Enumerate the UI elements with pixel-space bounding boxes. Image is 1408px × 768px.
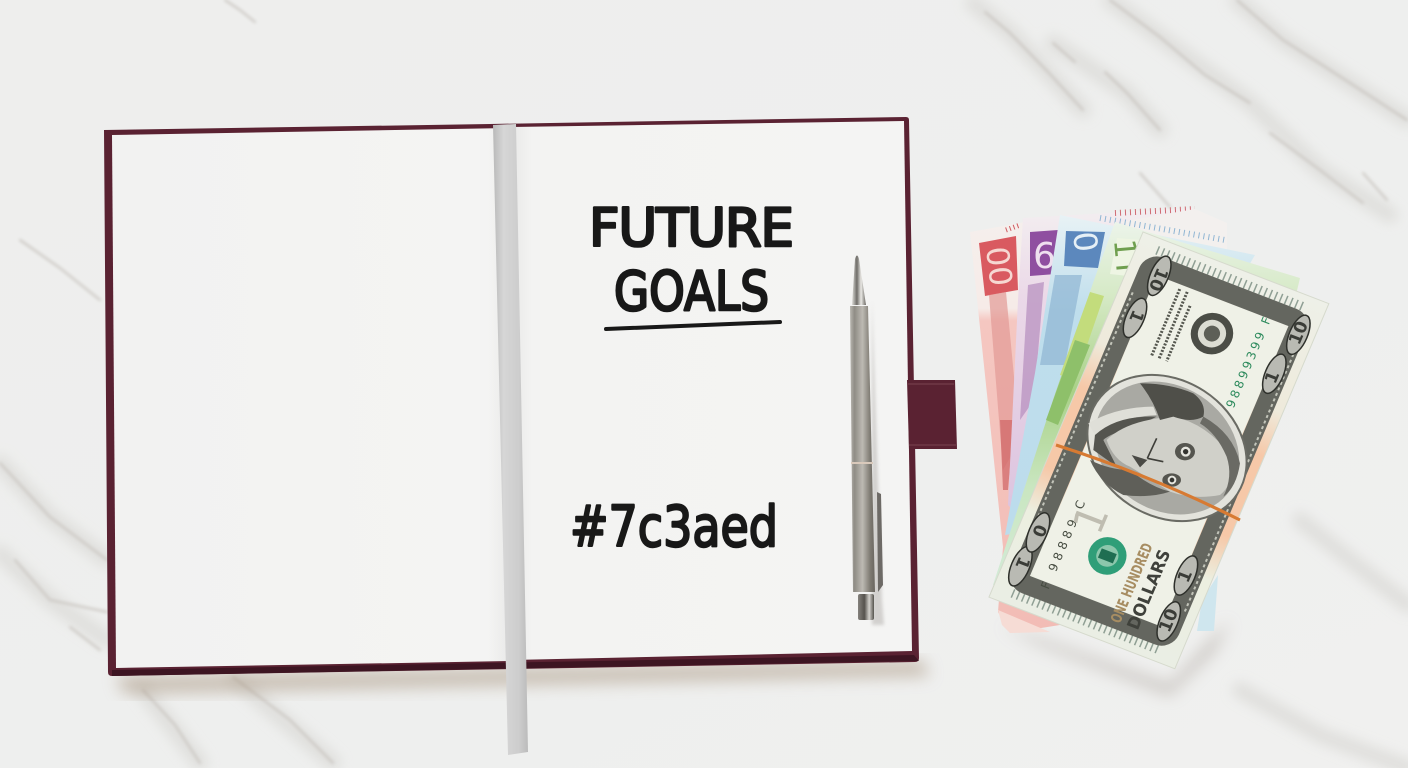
pink banknote [970,222,1060,633]
numerals on ovals: 1 [1010,554,1034,572]
numerals on ovals: 0 [1027,521,1050,540]
bill engraved frame [1017,263,1301,639]
green banknote: 1T [1106,238,1144,279]
pen end cap [858,594,874,620]
right page [512,121,912,660]
upper eye [1175,443,1195,460]
hundred dollar bill: DOLLARS [1124,547,1175,633]
stack of banknotes [970,208,1329,695]
pen barrel [850,306,875,592]
heading line one: FUTURE [589,198,794,259]
purple banknote: 6 [1033,236,1056,277]
heading line two: GOALS [614,260,769,323]
bill paper [989,232,1329,669]
blue banknote: 0 [1065,229,1105,254]
pale edges under stack [998,610,1050,633]
numerals on ovals [1008,259,1313,638]
nose and mouth [1132,455,1147,467]
frame highlights [1024,292,1293,612]
pen clip [877,492,883,592]
pen [850,256,884,625]
hair [1140,383,1204,420]
portrait [1060,345,1274,551]
numerals on ovals: 10 [1285,318,1313,348]
blue banknote [1005,215,1255,535]
portrait oval [1060,345,1274,551]
large treasury numeral: 1 [1063,498,1119,540]
pink banknote: 00 [978,245,1019,288]
blue banknote lower edge [1197,575,1218,631]
lower eye [1162,473,1181,487]
serial number bottom: F 98889 C [1038,498,1088,591]
face [1107,417,1232,497]
hundred dollar bill [989,232,1329,669]
cover bottom edge [112,655,919,676]
bill edge ticks [1012,250,1305,650]
pen tip [852,256,866,305]
signature lines top [1152,289,1195,361]
green seal [1082,532,1132,580]
ribbon bookmark [493,124,528,755]
numerals on ovals: 10 [1144,265,1172,294]
coat [1090,460,1170,496]
serial number top: A 98899399 F [1216,315,1274,426]
pen shadow [872,300,884,625]
handwritten hex code: #7c3aed [570,495,778,560]
denomination lettering: ONE HUNDRED [1107,541,1157,625]
notebook [104,117,957,755]
heading underline [606,322,780,329]
numerals on ovals: 10 [1155,606,1183,635]
numerals on ovals: 1 [1124,307,1147,325]
green banknote [993,222,1300,600]
collar [1088,407,1157,435]
rubber band [1056,445,1240,520]
banknotes shadow [1000,620,1230,695]
bill inner panel [1031,276,1288,626]
bookmark tab [907,380,957,449]
white banknote edge [1120,209,1227,250]
hair outline [1200,417,1240,497]
left page [112,128,512,668]
portrait engraving [1088,383,1240,497]
notebook cover [104,117,919,676]
numerals on ovals: 1 [1261,368,1284,387]
heading: future goals [589,198,794,329]
notebook shadow [116,660,930,694]
corner numerals [1004,248,1317,649]
purple banknote [1008,208,1210,560]
collar shadow [1093,417,1157,467]
treasury seal [1184,307,1240,361]
numerals on ovals: 1 [1174,567,1197,586]
